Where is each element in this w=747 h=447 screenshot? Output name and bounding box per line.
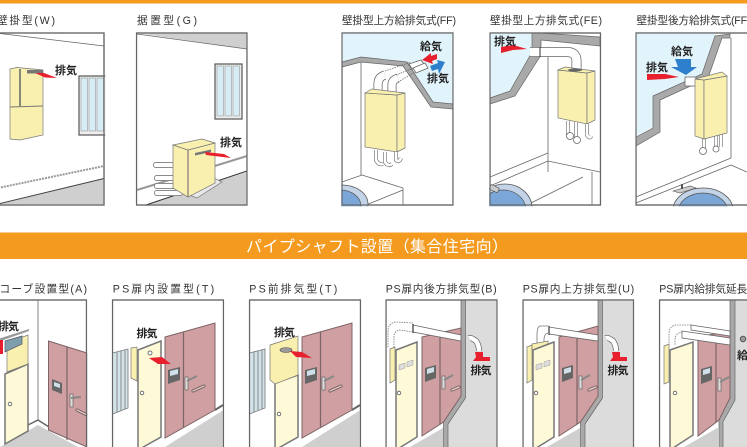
yellow unit (664, 344, 669, 384)
stand (191, 178, 222, 198)
water heater (7, 335, 28, 372)
maroon door (48, 341, 87, 447)
shaft wall (448, 300, 497, 447)
label: floor-standing G: 据置型(G) (137, 14, 197, 27)
duct pipe (530, 47, 576, 70)
supply label: 給気 (420, 39, 442, 53)
water heater (365, 89, 405, 152)
label: upper FE: 壁掛型上方排気式(FE) (490, 14, 602, 27)
exhaust label: 排気 (55, 63, 77, 77)
window (215, 64, 242, 119)
duct pipe (685, 77, 696, 86)
exhaust arrow (610, 352, 627, 361)
supply label: 給気 (671, 44, 693, 58)
exhaust elbow (469, 338, 479, 351)
yellow unit (527, 345, 532, 383)
supply opening (740, 336, 746, 342)
supply arrow (671, 59, 697, 75)
exhaust arrow (647, 74, 679, 80)
sink (341, 184, 368, 206)
panel: wall-mounted W (0, 33, 106, 205)
section banner: pipe shaft (0, 232, 747, 259)
duct pipes (669, 325, 730, 345)
maroon door (165, 323, 215, 438)
vent (5, 336, 22, 352)
PS door (533, 342, 554, 447)
PS door (275, 375, 298, 447)
PS door (138, 341, 161, 447)
water heater (270, 336, 298, 384)
supply arrow (422, 53, 437, 64)
shaft wall (723, 300, 747, 447)
water heater (10, 68, 43, 140)
water heater (695, 72, 727, 139)
exhaust label: 排気 (608, 363, 628, 377)
PS door (670, 342, 693, 447)
exhaust label: 排気 (494, 34, 516, 48)
exhaust label: 排気 (274, 325, 295, 339)
panel: alcove A (0, 300, 87, 447)
floor (287, 410, 360, 447)
yellow unit (131, 347, 137, 381)
floor (405, 428, 443, 447)
panel: PS upper exhaust U (523, 300, 634, 447)
panel: upper FE (489, 32, 602, 206)
duct pipe (388, 322, 461, 348)
exhaust arrow (205, 152, 231, 158)
exhaust arrow (290, 351, 312, 358)
panel: PS rear exhaust B (386, 300, 497, 447)
water heater (558, 67, 595, 124)
exhaust label: 排気 (136, 326, 158, 340)
panel: PS door T (112, 300, 224, 447)
window (250, 349, 265, 414)
exhaust arrow (149, 357, 171, 364)
maroon door (302, 323, 352, 438)
exhaust label: 排気 (427, 71, 449, 85)
exhaust label: 排気 (646, 60, 668, 74)
exhaust arrow (501, 45, 527, 53)
water pipes (376, 150, 401, 165)
floor (542, 428, 580, 447)
label: PS front exhaust T: PS前排気型(T) (249, 282, 337, 296)
maroon door (698, 331, 730, 436)
PS door (396, 342, 417, 447)
yellow unit (390, 347, 395, 383)
exhaust elbow (606, 338, 616, 351)
window (79, 76, 106, 135)
sink (672, 184, 733, 206)
water pipes (566, 121, 591, 144)
exhaust arrow (430, 60, 445, 74)
PS door (5, 364, 28, 444)
exhaust arrow (35, 73, 57, 78)
label: PS door T: PS扉内設置型(T) (113, 282, 214, 296)
panel: PS front exhaust T (250, 300, 360, 447)
exhaust label: 排気 (220, 135, 242, 149)
window (112, 349, 128, 414)
floor (150, 410, 224, 447)
panel: PS extended (660, 300, 747, 447)
section banner: pipe shaft: パイプシャフト設置（集合住宅向） (246, 238, 508, 256)
floor (0, 178, 104, 205)
panel: rear FF (635, 32, 747, 206)
label: PS upper exhaust U: PS扉内上方排気型(U) (523, 282, 634, 296)
maroon door (422, 328, 461, 436)
exhaust label: 排気 (470, 363, 492, 377)
pipes (156, 165, 180, 193)
duct pipes (378, 60, 428, 92)
exhaust arrow (473, 352, 490, 361)
shaft wall (585, 300, 634, 447)
duct pipe (537, 326, 598, 345)
floor (0, 425, 78, 447)
sink (489, 184, 532, 206)
panel: upper FF (341, 32, 454, 206)
label: upper FF: 壁掛型上方給排気式(FF) (342, 14, 456, 27)
water pipes (700, 134, 721, 154)
exhaust arrow (0, 340, 3, 354)
top orange banner (0, 0, 747, 4)
label: PS rear exhaust B: PS扉内後方排気型(B) (386, 282, 497, 296)
floor (678, 427, 719, 447)
panel: floor-standing G (136, 33, 247, 205)
vent (280, 348, 292, 352)
water heater (173, 139, 215, 197)
maroon door (559, 326, 598, 436)
